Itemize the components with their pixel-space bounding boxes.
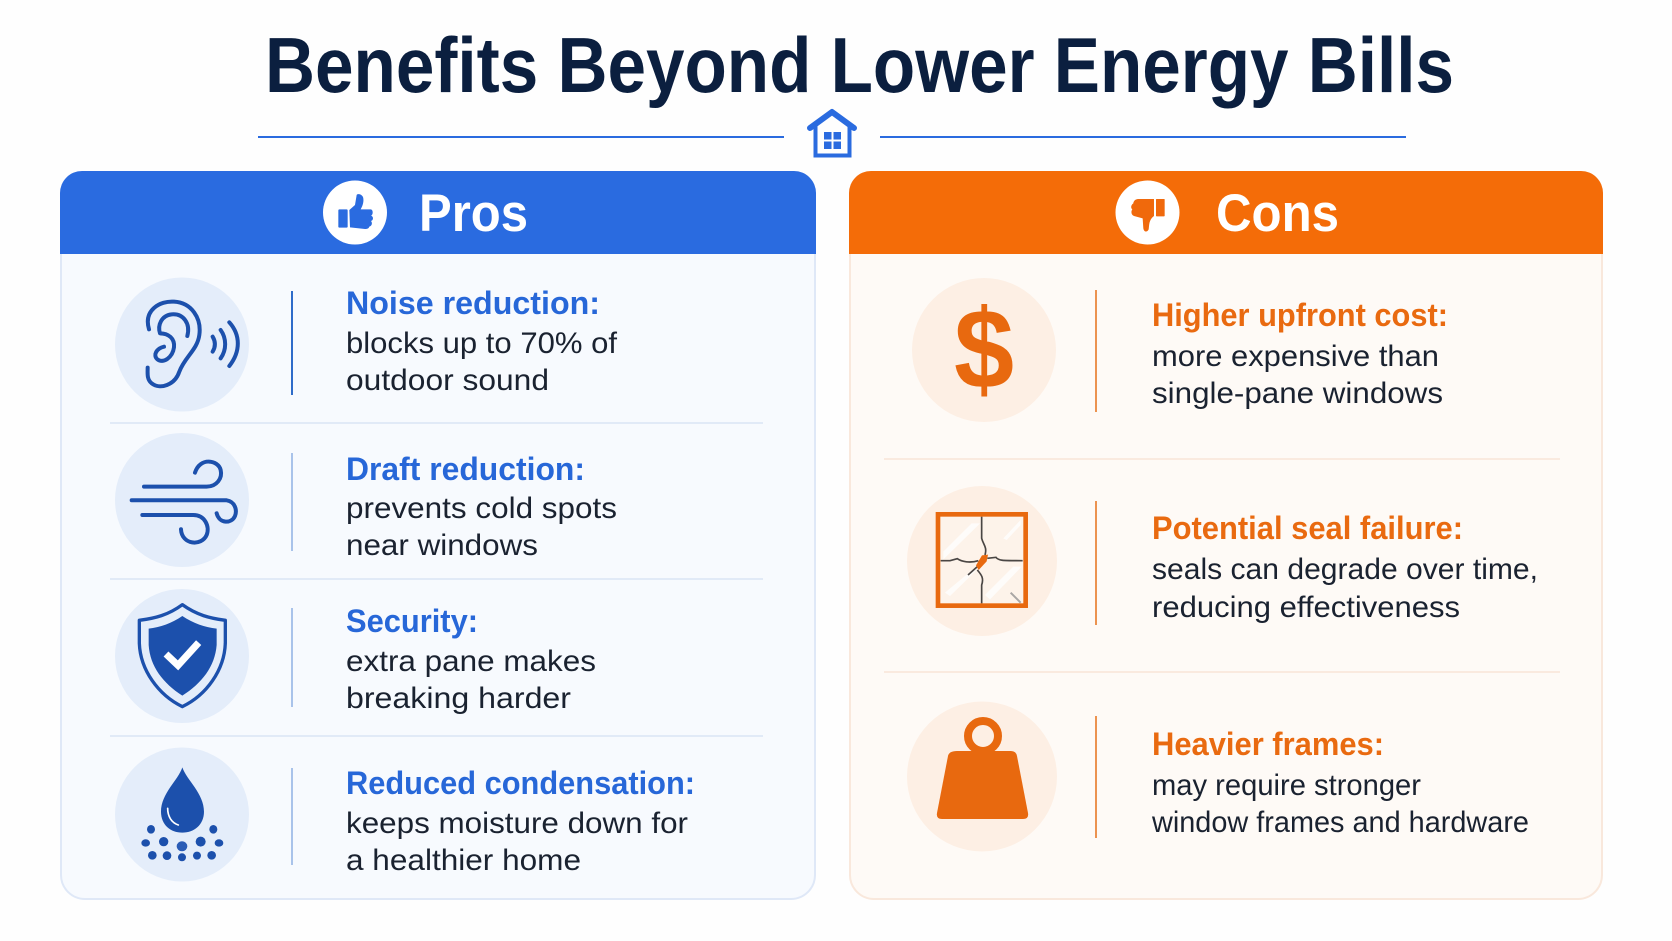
text: noise reduction [346,285,618,397]
cons heading: Cons [1216,184,1339,243]
text: draft reduction: near windows [346,529,538,562]
cons header band [849,171,1603,254]
icon: dollar sign: $ [954,286,1014,412]
cons item: potential seal failure [907,486,1538,636]
icon: water drop [141,767,223,861]
pros heading: Pros [419,184,528,243]
text: reduced condensation [346,765,695,877]
text: draft reduction: prevents cold spots [346,492,617,525]
icon: weight [937,721,1028,819]
text: security: Security: [346,603,478,639]
cons item: higher upfront cost [912,278,1448,422]
text: higher upfront cost: single-pane windows [1152,377,1443,410]
text: heavier frames: Heavier frames: [1152,726,1384,762]
text: heavier frames [1151,726,1529,839]
pros header band [60,171,816,254]
icon: cracked window [938,514,1026,606]
text: potential seal failure: seals can degrade over time, [1152,553,1538,586]
text: noise reduction: Noise reduction: [346,285,600,321]
pros item: draft reduction [115,433,617,567]
title: Benefits Beyond Lower Energy Bills [265,21,1454,109]
text: higher upfront cost: Higher upfront cost: [1152,297,1448,333]
text: draft reduction [346,451,617,562]
text: heavier frames: window frames and hardware [1151,806,1529,839]
icon: house [810,112,854,156]
text: potential seal failure: reducing effectiveness [1152,591,1460,624]
text: potential seal failure [1152,510,1538,624]
text: reduced condensation: a healthier home [346,844,581,877]
text: draft reduction: Draft reduction: [346,451,585,487]
icon: wind [132,462,236,543]
icon: thumbs up [323,180,387,244]
text: security: extra pane makes [346,645,596,678]
pros item: security [115,589,596,723]
text: reduced condensation: keeps moisture down for [346,807,688,840]
text: reduced condensation: Reduced condensation: [346,765,695,801]
text: noise reduction: blocks up to 70% of [346,327,618,360]
text: higher upfront cost: more expensive than [1152,340,1439,373]
pros item: noise reduction [115,278,618,412]
icon: shield [139,605,225,707]
cons item: heavier frames [907,702,1529,852]
text: higher upfront cost [1152,297,1448,410]
icon: ear [148,302,238,386]
panel: pros [60,171,816,899]
panel: cons [849,171,1603,899]
pros item: reduced condensation [115,748,695,882]
text: heavier frames: may require stronger [1152,769,1421,802]
text: security: breaking harder [346,682,571,715]
icon: thumbs down [1116,180,1180,244]
text: security [346,603,596,715]
text: noise reduction: outdoor sound [346,364,549,397]
text: potential seal failure: Potential seal failure: [1152,510,1463,546]
